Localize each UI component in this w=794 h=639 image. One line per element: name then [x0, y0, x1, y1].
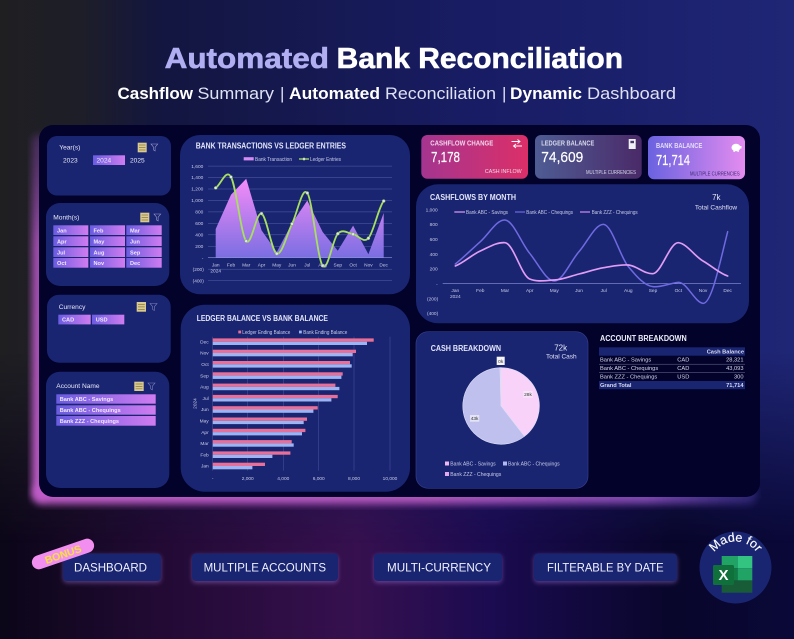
- title: [165, 43, 623, 75]
- icon: excel logo: X: [718, 567, 729, 584]
- chart: bank transactions vs ledger entries: 2024: [210, 268, 221, 274]
- chart: ledger balance vs bank balance: Oct: [201, 362, 209, 368]
- slicer: account name: Account Name: [56, 383, 100, 390]
- chart: cashflows by month: (200): [427, 296, 439, 302]
- subtitle: Reconciliation: [385, 84, 496, 103]
- slicer: months: Mar: [130, 228, 141, 234]
- chart: cashflows by month: (400): [427, 311, 439, 317]
- slicer: months: Dec: [130, 261, 140, 267]
- kpi card: cashflow change: CASHFLOW CHANGE: [430, 138, 493, 147]
- chart: ledger balance vs bank balance: May: [200, 418, 209, 424]
- chart: cashflows by month: 2024: [450, 294, 461, 300]
- chart: bank transactions vs ledger entries: 600: [195, 221, 204, 227]
- chart: cashflows by month: 7k: [712, 193, 722, 202]
- dashboard panel: [32, 125, 760, 504]
- chart: ledger balance vs bank balance: LEDGER BALANCE VS BANK BALANCE: [197, 313, 328, 323]
- chart: bank transactions vs ledger entries: Oct: [349, 262, 357, 268]
- subtitle: Cashflow: [118, 84, 194, 103]
- chart: cashflows by month: Dec: [723, 288, 733, 294]
- table: account breakdown: Bank ABC - Chequings: [600, 366, 658, 372]
- feature button: multi-currency: [374, 554, 502, 583]
- chart: ledger balance vs bank balance: [181, 305, 410, 492]
- chart: cashflows by month: 600: [430, 237, 438, 243]
- chart: ledger balance vs bank balance: Aug: [200, 385, 209, 391]
- chart: ledger balance vs bank balance: Jan: [201, 464, 209, 470]
- chart: bank transactions vs ledger entries: (400): [193, 278, 204, 284]
- feature button: multiple accounts: [192, 554, 338, 583]
- table: account breakdown: 43,093: [726, 366, 744, 372]
- table: account breakdown: CAD: [677, 358, 689, 364]
- subtitle: Dynamic: [510, 84, 582, 103]
- kpi card: cashflow change: 7,178: [431, 149, 460, 166]
- chart: cash breakdown pie: [416, 332, 588, 488]
- chart: cash breakdown pie: 28k: [524, 392, 532, 398]
- title: Bank Reconciliation: [337, 43, 623, 75]
- chart: bank transactions vs ledger entries: Bank Transaction: [255, 157, 292, 163]
- chart: ledger balance vs bank balance: Bank Ending Balance: [303, 330, 347, 336]
- chart: ledger balance vs bank balance: Mar: [200, 441, 209, 447]
- slicer: months: Jan: [57, 228, 67, 234]
- slicer: years: Year(s): [59, 144, 80, 152]
- table: account breakdown: Bank ZZZ - Chequings: [600, 374, 657, 380]
- chart: ledger balance vs bank balance: Dec: [200, 339, 209, 345]
- chart: ledger balance vs bank balance: Apr: [201, 430, 209, 436]
- chart: bank transactions vs ledger entries: Sep: [334, 262, 342, 268]
- feature button: dashboard: [63, 554, 161, 583]
- badge: made for excel: Made for: [708, 532, 762, 552]
- chart: ledger balance vs bank balance: Sep: [200, 373, 209, 379]
- slicer: months: [46, 203, 169, 286]
- slicer: months: Nov: [94, 261, 105, 267]
- table: account breakdown: Bank ABC - Savings: [600, 358, 651, 364]
- slicer: currency: [47, 295, 171, 363]
- chart: cashflows by month: 800: [430, 222, 438, 228]
- icon: ledger document: [629, 139, 636, 149]
- chart: ledger balance vs bank balance: 2024: [192, 398, 198, 409]
- chart: cash breakdown pie: Total Cash: [546, 353, 577, 360]
- chart: cashflows by month: [416, 184, 749, 323]
- chart: bank transactions vs ledger entries: 1,600: [191, 164, 204, 170]
- slicer: years: 2024: [96, 157, 112, 164]
- chart: cash breakdown pie: Bank ABC - Chequings: [508, 462, 560, 468]
- slicer: account name: Bank ABC - Chequings: [60, 408, 121, 414]
- chart: bank transactions vs ledger entries: 1,000: [191, 198, 204, 204]
- chart: cash breakdown pie: 43k: [471, 416, 479, 422]
- chart: ledger balance vs bank balance: Feb: [200, 452, 209, 458]
- chart: bank transactions vs ledger entries: 1,400: [191, 175, 204, 181]
- chart: cashflows by month: Mar: [501, 288, 510, 294]
- kpi card: cashflow change: [421, 135, 528, 179]
- pie slices: [463, 368, 539, 444]
- feature button: filterable by date: FILTERABLE BY DATE: [547, 561, 664, 575]
- chart: cashflows by month: Nov: [699, 288, 708, 294]
- chart: cashflows by month: Aug: [624, 288, 633, 294]
- chart: bank transactions vs ledger entries: BANK TRANSACTIONS VS LEDGER ENTRIES: [196, 140, 346, 150]
- kpi card: ledger balance: MULTIPLE CURRENCIES: [586, 170, 636, 176]
- slicer: months: Month(s): [53, 214, 79, 221]
- icon: piggy bank: [732, 144, 742, 152]
- kpi card: cashflow change: CASH INFLOW: [485, 169, 522, 175]
- subtitle: Summary: [198, 84, 275, 103]
- chart: bank transactions vs ledger entries: May: [272, 262, 282, 268]
- chart: bank transactions vs ledger entries: Jul: [304, 262, 310, 268]
- table: account breakdown: 28,321: [726, 358, 744, 364]
- chart: ledger balance vs bank balance: 10,000: [383, 476, 398, 482]
- subtitle: |: [280, 84, 284, 103]
- feature button: filterable by date: [534, 554, 677, 583]
- chart: cashflows by month: Apr: [526, 288, 534, 294]
- bonus badge: BONUS: [43, 543, 83, 567]
- chart: cashflows by month: -: [436, 282, 438, 287]
- chart: bank transactions vs ledger entries: 800: [195, 210, 204, 216]
- chart: cashflows by month: Sep: [649, 288, 658, 294]
- table: account breakdown: 71,714: [726, 383, 744, 389]
- chart: bank transactions vs ledger entries: 400: [195, 232, 204, 238]
- chart: cashflows by month: Bank ABC - Chequings: [526, 210, 573, 216]
- chart: cashflows by month: Bank ZZZ - Chequings: [592, 210, 638, 216]
- chart: bank transactions vs ledger entries: 200: [195, 244, 204, 250]
- chart: ledger balance vs bank balance: -: [212, 477, 214, 482]
- chart: cashflows by month: 1,000: [426, 207, 438, 213]
- chart: bank transactions vs ledger entries: Jun: [288, 262, 296, 268]
- chart: ledger balance vs bank balance: 4,000: [277, 476, 290, 482]
- chart: ledger balance vs bank balance: 6,000: [313, 476, 325, 482]
- title: Automated: [165, 43, 329, 75]
- chart: cashflows by month: Jan: [451, 288, 459, 294]
- feature button: dashboard: DASHBOARD: [74, 561, 147, 575]
- chart: cash breakdown pie: 0k: [498, 359, 504, 365]
- chart: ledger balance vs bank balance: Ledger Ending Balance: [242, 330, 290, 336]
- chart: cashflows by month: Jul: [601, 288, 607, 294]
- chart: cash breakdown pie: CASH BREAKDOWN: [431, 343, 501, 353]
- slicer: currency: USD: [96, 318, 108, 324]
- slicer: months: Apr: [57, 239, 67, 245]
- chart: bank transactions vs ledger entries: [180, 135, 410, 294]
- slicer: months: Sep: [130, 250, 141, 256]
- slicer: account name: [46, 372, 169, 488]
- table: account breakdown: Cash Balance: [707, 350, 744, 356]
- kpi card: ledger balance: LEDGER BALANCE: [541, 138, 594, 147]
- chart: bank transactions vs ledger entries: Ledger Entries: [310, 157, 341, 163]
- chart: cash breakdown pie: Bank ABC - Savings: [450, 462, 496, 468]
- chart: cashflows by month: May: [550, 288, 559, 294]
- chart: bank transactions vs ledger entries: -: [202, 256, 204, 261]
- subtitle: |: [502, 84, 506, 103]
- feature button: multiple accounts: MULTIPLE ACCOUNTS: [204, 561, 326, 575]
- icon: transfer arrows: [512, 140, 522, 148]
- chart: bank transactions vs ledger entries: (200): [193, 267, 204, 273]
- kpi card: bank balance: MULTIPLE CURRENCIES: [690, 171, 740, 177]
- slicer: years: 2023: [63, 157, 78, 164]
- chart: cashflows by month: Jun: [575, 288, 583, 294]
- kpi card: bank balance: [648, 136, 745, 179]
- table: account breakdown: 300: [734, 374, 744, 380]
- chart: bank transactions vs ledger entries: Nov: [364, 262, 373, 268]
- slicer: years: [47, 136, 171, 196]
- kpi card: ledger balance: [535, 135, 642, 179]
- table: account breakdown: USD: [677, 374, 689, 380]
- table: account breakdown: ACCOUNT BREAKDOWN: [600, 334, 687, 343]
- chart: bank transactions vs ledger entries: Feb: [227, 262, 235, 268]
- chart: cashflows by month: Feb: [476, 288, 485, 294]
- chart: bank transactions vs ledger entries: 1,200: [191, 187, 204, 193]
- slicer: months: Oct: [57, 261, 66, 267]
- table: account breakdown: CAD: [677, 366, 689, 372]
- badge: made for excel: [700, 532, 772, 604]
- slicer: months: May: [94, 239, 105, 245]
- kpi card: bank balance: BANK BALANCE: [656, 141, 702, 150]
- slicer: currency: Currency: [59, 304, 86, 311]
- chart: cash breakdown pie: 72k: [554, 343, 568, 352]
- chart: ledger balance vs bank balance: 8,000: [348, 476, 360, 482]
- chart: cashflows by month: Bank ABC - Savings: [466, 210, 508, 216]
- subtitle: [118, 84, 676, 103]
- chart: bank transactions vs ledger entries: Dec: [379, 262, 389, 268]
- chart: bank transactions vs ledger entries: Mar: [242, 262, 251, 268]
- slicer: months: Jun: [130, 239, 141, 245]
- slicer: account name: Bank ZZZ - Chequings: [60, 419, 119, 425]
- chart: ledger balance vs bank balance: 2,000: [242, 476, 254, 482]
- table: account breakdown: [599, 334, 745, 389]
- slicer: months: Aug: [94, 250, 105, 256]
- slicer: months: Feb: [94, 228, 104, 234]
- chart: ledger balance vs bank balance: Jul: [203, 396, 209, 402]
- chart: bank transactions vs ledger entries: Jan: [212, 262, 220, 268]
- chart: cash breakdown pie: Bank ZZZ - Chequings: [450, 472, 502, 478]
- slicer: months: Jul: [57, 250, 66, 256]
- chart: ledger balance vs bank balance: Nov: [200, 351, 209, 357]
- chart: cashflows by month: 200: [430, 267, 438, 273]
- kpi card: bank balance: 71,714: [656, 152, 690, 169]
- subtitle: Dashboard: [587, 84, 676, 103]
- subtitle: Automated: [289, 84, 380, 103]
- chart: cashflows by month: Oct: [675, 288, 683, 294]
- slicer: years: 2025: [130, 157, 145, 164]
- chart: cashflows by month: 400: [430, 252, 438, 258]
- table: account breakdown: Grand Total: [600, 383, 632, 389]
- chart: cashflows by month: CASHFLOWS BY MONTH: [430, 192, 516, 202]
- bonus badge: [30, 537, 96, 571]
- chart: ledger balance vs bank balance: Jun: [201, 407, 209, 413]
- chart: bank transactions vs ledger entries: Aug: [318, 262, 327, 268]
- chart: cashflows by month: Total Cashflow: [695, 204, 737, 211]
- slicer: account name: Bank ABC - Savings: [60, 397, 113, 403]
- chart: bank transactions vs ledger entries: Apr: [258, 262, 266, 268]
- slicer: currency: CAD: [62, 318, 74, 324]
- kpi card: ledger balance: 74,609: [541, 149, 583, 166]
- feature button: multi-currency: MULTI-CURRENCY: [387, 561, 491, 575]
